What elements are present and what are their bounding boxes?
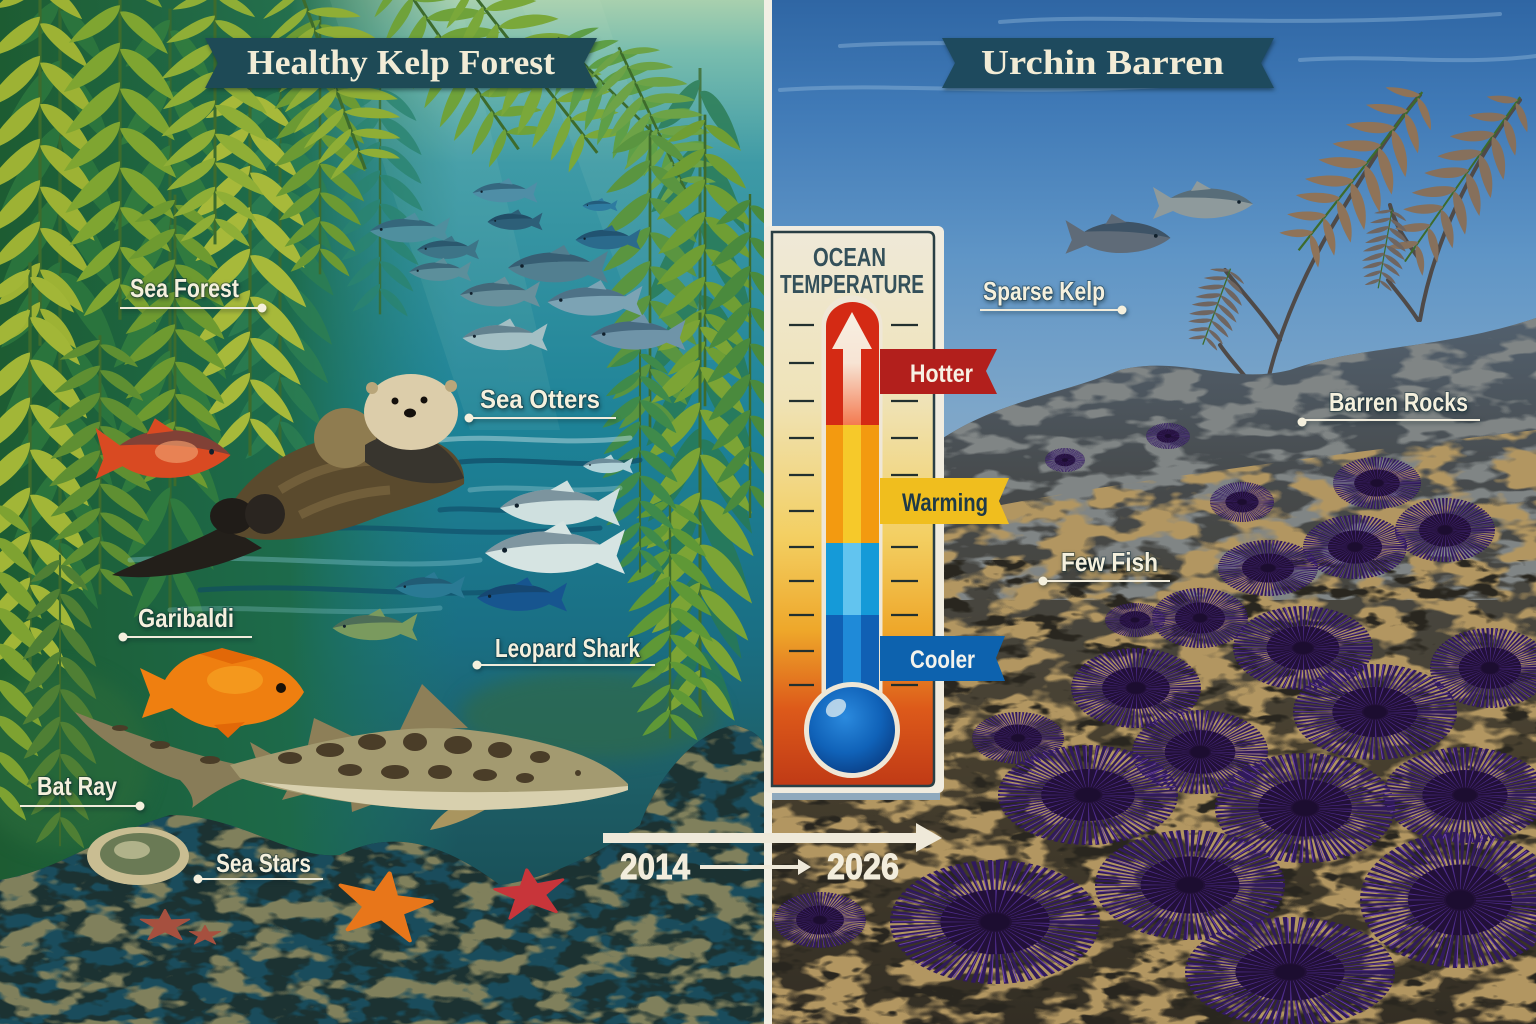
seabed vegetation haze [0, 670, 720, 850]
red rockfish [96, 418, 230, 479]
ocean temperature thermometer panel [764, 226, 1009, 793]
label: Sea Forest: Sea Forest [130, 273, 239, 303]
label: Leopard Shark [472, 633, 655, 670]
otter body [222, 432, 464, 540]
year 2014: 2014 [620, 846, 690, 887]
label: Bat Ray [20, 771, 144, 810]
label: Leopard Shark: Leopard Shark [495, 633, 640, 663]
label: Barren Rocks: Barren Rocks [1329, 387, 1468, 417]
kelp fronds: left wall [0, 0, 371, 851]
ribbon: Cooler: Cooler [910, 646, 975, 674]
label: Sea Otters [464, 384, 616, 422]
shark spots [112, 725, 581, 783]
label: Sea Forest [120, 273, 266, 312]
otter arm [365, 434, 464, 483]
label: Barren Rocks [1298, 387, 1480, 426]
panel: healthy kelp forest [0, 0, 798, 1024]
short arrow [700, 859, 811, 875]
title banner: Urchin Barren: Urchin Barren [981, 43, 1224, 82]
thermometer tube [822, 296, 882, 700]
ribbon: Warming [880, 478, 1009, 524]
label: Bat Ray: Bat Ray [37, 771, 117, 801]
urchin field [786, 426, 1534, 1012]
fish school [370, 178, 686, 351]
light rays [330, 0, 720, 430]
shark body [230, 728, 628, 810]
thermometer heading: TEMPERATURE [780, 269, 924, 299]
otter head [364, 374, 458, 450]
sparse kelp stalks [1188, 87, 1528, 374]
title banner: Healthy Kelp Forest [205, 38, 597, 88]
kelp fronds: top canopy [263, 0, 716, 202]
year 2026: 2026 [827, 846, 899, 887]
ribbon: Cooler [880, 636, 1005, 681]
thermometer heading: OCEAN [813, 242, 886, 272]
ribbon: Hotter [880, 349, 997, 394]
panel: urchin barren [772, 0, 1536, 1024]
label: Garibaldi: Garibaldi [138, 603, 234, 633]
grey fish [1066, 181, 1253, 254]
divider between panels [764, 0, 772, 1024]
silver fish near otter [332, 454, 633, 641]
long arrow [603, 823, 942, 852]
ribbon: Warming: Warming [902, 489, 988, 517]
title banner: Urchin Barren [942, 38, 1274, 88]
label: Sea Stars [194, 852, 323, 884]
label: Sea Stars: Sea Stars [216, 848, 311, 878]
sea stars [141, 865, 567, 944]
label: Garibaldi [118, 603, 252, 642]
time arrow: 2014 to 2026 [603, 823, 942, 887]
otter pup [314, 408, 376, 468]
otter feet [210, 498, 250, 534]
label: Few Fish: Few Fish [1061, 547, 1158, 577]
ribbon: Hotter: Hotter [910, 360, 973, 388]
water ripples [130, 438, 640, 612]
shark tail [75, 712, 245, 808]
rock ground right [772, 318, 1536, 1024]
abalone shell [87, 827, 189, 885]
shark fins [400, 684, 468, 730]
leopard shark [75, 684, 628, 830]
scale ticks [789, 325, 918, 685]
thermometer heading [780, 242, 924, 299]
otter tail [112, 525, 262, 577]
kelp fronds: right wall [598, 115, 798, 743]
garibaldi fish [140, 648, 304, 738]
rocky seabed left [0, 725, 764, 1024]
rising arrow [832, 312, 872, 425]
label: Sea Otters: Sea Otters [480, 384, 600, 414]
label: Few Fish [1038, 547, 1170, 586]
label: Sparse Kelp: Sparse Kelp [983, 276, 1105, 306]
surface light streaks [780, 14, 1536, 90]
thermometer bulb [804, 682, 900, 778]
title banner: Healthy Kelp Forest: Healthy Kelp Forest [247, 43, 555, 82]
kelp fronds: far layer [0, 0, 760, 727]
sea otter with pup [112, 374, 464, 577]
